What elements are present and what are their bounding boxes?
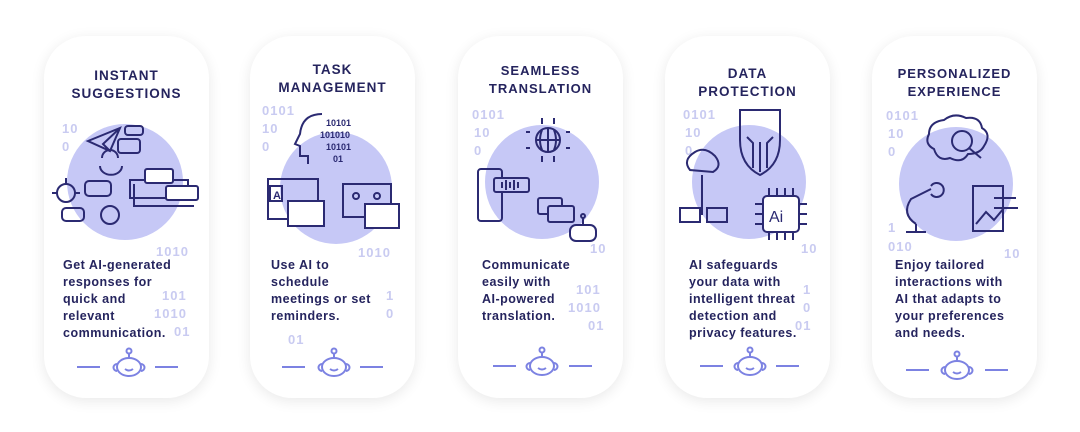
card: seamless translation: 0	[474, 143, 482, 158]
card: instant suggestions: 01	[174, 324, 190, 339]
card: seamless translation: 10	[474, 125, 490, 140]
card: task management: 0101	[262, 103, 295, 118]
heading	[489, 63, 592, 96]
card: data protection: 0	[685, 143, 693, 158]
card: data protection: 1	[803, 282, 811, 297]
card: personalized experience: 1	[888, 220, 896, 235]
card: personalized experience: 10	[888, 126, 904, 141]
text block: Use AI to	[271, 258, 329, 272]
card: personalized experience: 0	[888, 144, 896, 159]
card: instant suggestions: 1010	[156, 244, 189, 259]
text block: interactions with	[895, 275, 1003, 289]
text block: quick and	[63, 292, 126, 306]
text block: responses for	[63, 275, 152, 289]
card: data protection	[665, 36, 830, 398]
card: seamless translation	[458, 36, 623, 398]
text block: your data with	[689, 275, 781, 289]
heading	[278, 62, 387, 95]
card: task management: 10101	[326, 142, 351, 152]
card: personalized experience: 10	[1004, 246, 1020, 261]
heading	[898, 66, 1011, 99]
text block: AI-powered	[482, 292, 555, 306]
heading: SEAMLESS	[501, 63, 580, 78]
card: data protection: 0101	[683, 107, 716, 122]
card: data protection: 10	[685, 125, 701, 140]
text block: translation.	[482, 309, 555, 323]
card: seamless translation: 0101	[472, 107, 505, 122]
card: data protection: 01	[795, 318, 811, 333]
card: seamless translation: 101	[576, 282, 601, 297]
text block	[482, 258, 570, 323]
card: task management: 01	[333, 154, 343, 164]
card: task management: 101010	[320, 130, 350, 140]
card: task management: 0	[386, 306, 394, 321]
text block: communication.	[63, 326, 166, 340]
text block: relevant	[63, 309, 115, 323]
heading: TRANSLATION	[489, 81, 592, 96]
icon: robot footer	[282, 348, 383, 377]
icon: globe chip, phone, chat, robot	[478, 118, 596, 241]
heading	[71, 68, 182, 101]
card: data protection: Ai	[769, 209, 783, 226]
card: personalized experience: 010	[888, 239, 913, 254]
card: seamless translation: 10	[590, 241, 606, 256]
text block: and needs.	[895, 326, 965, 340]
text block: intelligent threat	[689, 292, 795, 306]
card: instant suggestions: 1010	[154, 306, 187, 321]
heading: EXPERIENCE	[908, 84, 1001, 99]
card: task management: 1	[386, 288, 394, 303]
text block	[689, 258, 797, 340]
text block	[63, 258, 171, 340]
card: instant suggestions	[44, 36, 209, 398]
card: data protection: 0	[803, 300, 811, 315]
icon: head binary + windows	[268, 114, 399, 228]
heading: TASK	[313, 62, 352, 77]
text block: Enjoy tailored	[895, 258, 985, 272]
card: instant suggestions: 10	[62, 121, 78, 136]
icon: brain, robot arm, chart	[906, 115, 1018, 232]
text block: schedule	[271, 275, 329, 289]
card: task management	[250, 36, 415, 398]
card: personalized experience: 0101	[886, 108, 919, 123]
text block: privacy features.	[689, 326, 797, 340]
card: instant suggestions: 0	[62, 139, 70, 154]
heading: MANAGEMENT	[278, 80, 387, 95]
heading: PERSONALIZED	[898, 66, 1011, 81]
text block: easily with	[482, 275, 551, 289]
text block: your preferences	[895, 309, 1004, 323]
icon: robot footer	[77, 348, 178, 377]
card: task management: 0	[262, 139, 270, 154]
card: task management: 1010	[358, 245, 391, 260]
heading	[698, 66, 797, 99]
text block: detection and	[689, 309, 777, 323]
text block	[895, 258, 1004, 340]
text block: Communicate	[482, 258, 570, 272]
heading: SUGGESTIONS	[71, 86, 182, 101]
card: task management: 10101	[326, 118, 351, 128]
text block	[271, 258, 371, 323]
text block: reminders.	[271, 309, 340, 323]
icon: robot footer	[700, 346, 799, 376]
heading: DATA	[728, 66, 767, 81]
text block: Get AI-generated	[63, 258, 171, 272]
card: task management: 10	[262, 121, 278, 136]
card: seamless translation: 01	[588, 318, 604, 333]
text block: meetings or set	[271, 292, 371, 306]
icon: robot footer	[493, 346, 592, 376]
card: instant suggestions: 101	[162, 288, 187, 303]
icon: chat cluster	[52, 126, 198, 224]
card: personalized experience	[872, 36, 1037, 398]
card: task management: 01	[288, 332, 304, 347]
text block: AI safeguards	[689, 258, 778, 272]
card: task management: A	[273, 190, 281, 202]
text block: AI that adapts to	[895, 292, 1001, 306]
heading: PROTECTION	[698, 84, 797, 99]
icon: robot footer	[906, 350, 1008, 380]
card: seamless translation: 1010	[568, 300, 601, 315]
icon: shield, tree, chip	[680, 110, 807, 240]
card: data protection: 10	[801, 241, 817, 256]
heading: INSTANT	[94, 68, 159, 83]
